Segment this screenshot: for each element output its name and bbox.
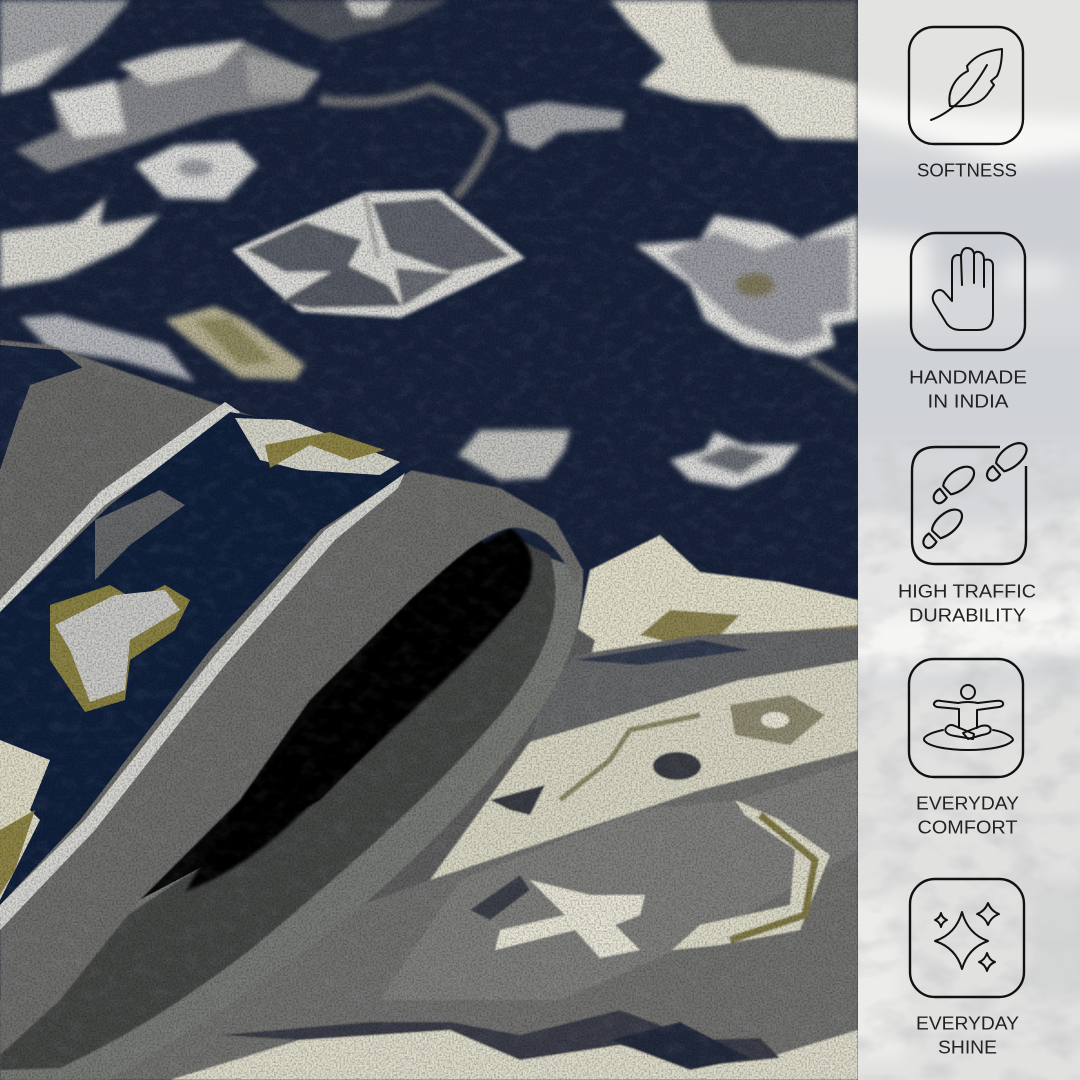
icon: sparkles: [910, 879, 1024, 997]
roll dark opening: [185, 528, 532, 892]
roll underside inner surface: [0, 540, 555, 1070]
small motifs above the roll: [165, 306, 800, 488]
feature: everyday comfort: COMFORT: [918, 818, 1018, 838]
feature: everyday shine: [910, 879, 1024, 1058]
feature: handmade in india: [909, 233, 1027, 412]
lower right rug field: [0, 535, 858, 1080]
label: softness: SOFTNESS: [917, 160, 1017, 180]
feature: high traffic durability: [898, 438, 1036, 626]
feature: everyday comfort: [909, 659, 1023, 838]
side panel: [858, 0, 1080, 1080]
icon: seated meditation: [909, 659, 1023, 777]
roll inner shadow: [120, 525, 525, 910]
label: high traffic durability: HIGH TRAFFIC: [898, 582, 1036, 602]
label: handmade in india: HANDMADE: [909, 368, 1027, 388]
rolled rug: [0, 340, 583, 1080]
feature: high traffic durability: DURABILITY: [909, 606, 1026, 626]
roll underside outer band: [0, 540, 583, 1080]
icon: feather: [909, 27, 1023, 144]
top-left floral motifs: [0, 0, 625, 382]
icon: footprints: [912, 438, 1031, 564]
icon: hand: [911, 233, 1025, 350]
right flower motif: [635, 215, 858, 390]
roll top surface: [0, 340, 583, 1055]
feature: softness: [909, 27, 1023, 180]
top-right cream and grey motif: [610, 0, 858, 140]
feature: everyday shine: SHINE: [938, 1038, 997, 1058]
label: everyday comfort: EVERYDAY: [916, 794, 1019, 814]
centre tile motif: [232, 190, 525, 318]
pile mottling: [0, 0, 858, 1080]
fabric grain: [0, 0, 858, 1080]
rug photograph background: [0, 0, 858, 1080]
label: everyday shine: EVERYDAY: [916, 1014, 1019, 1034]
feature: handmade in india: IN INDIA: [928, 392, 1008, 412]
